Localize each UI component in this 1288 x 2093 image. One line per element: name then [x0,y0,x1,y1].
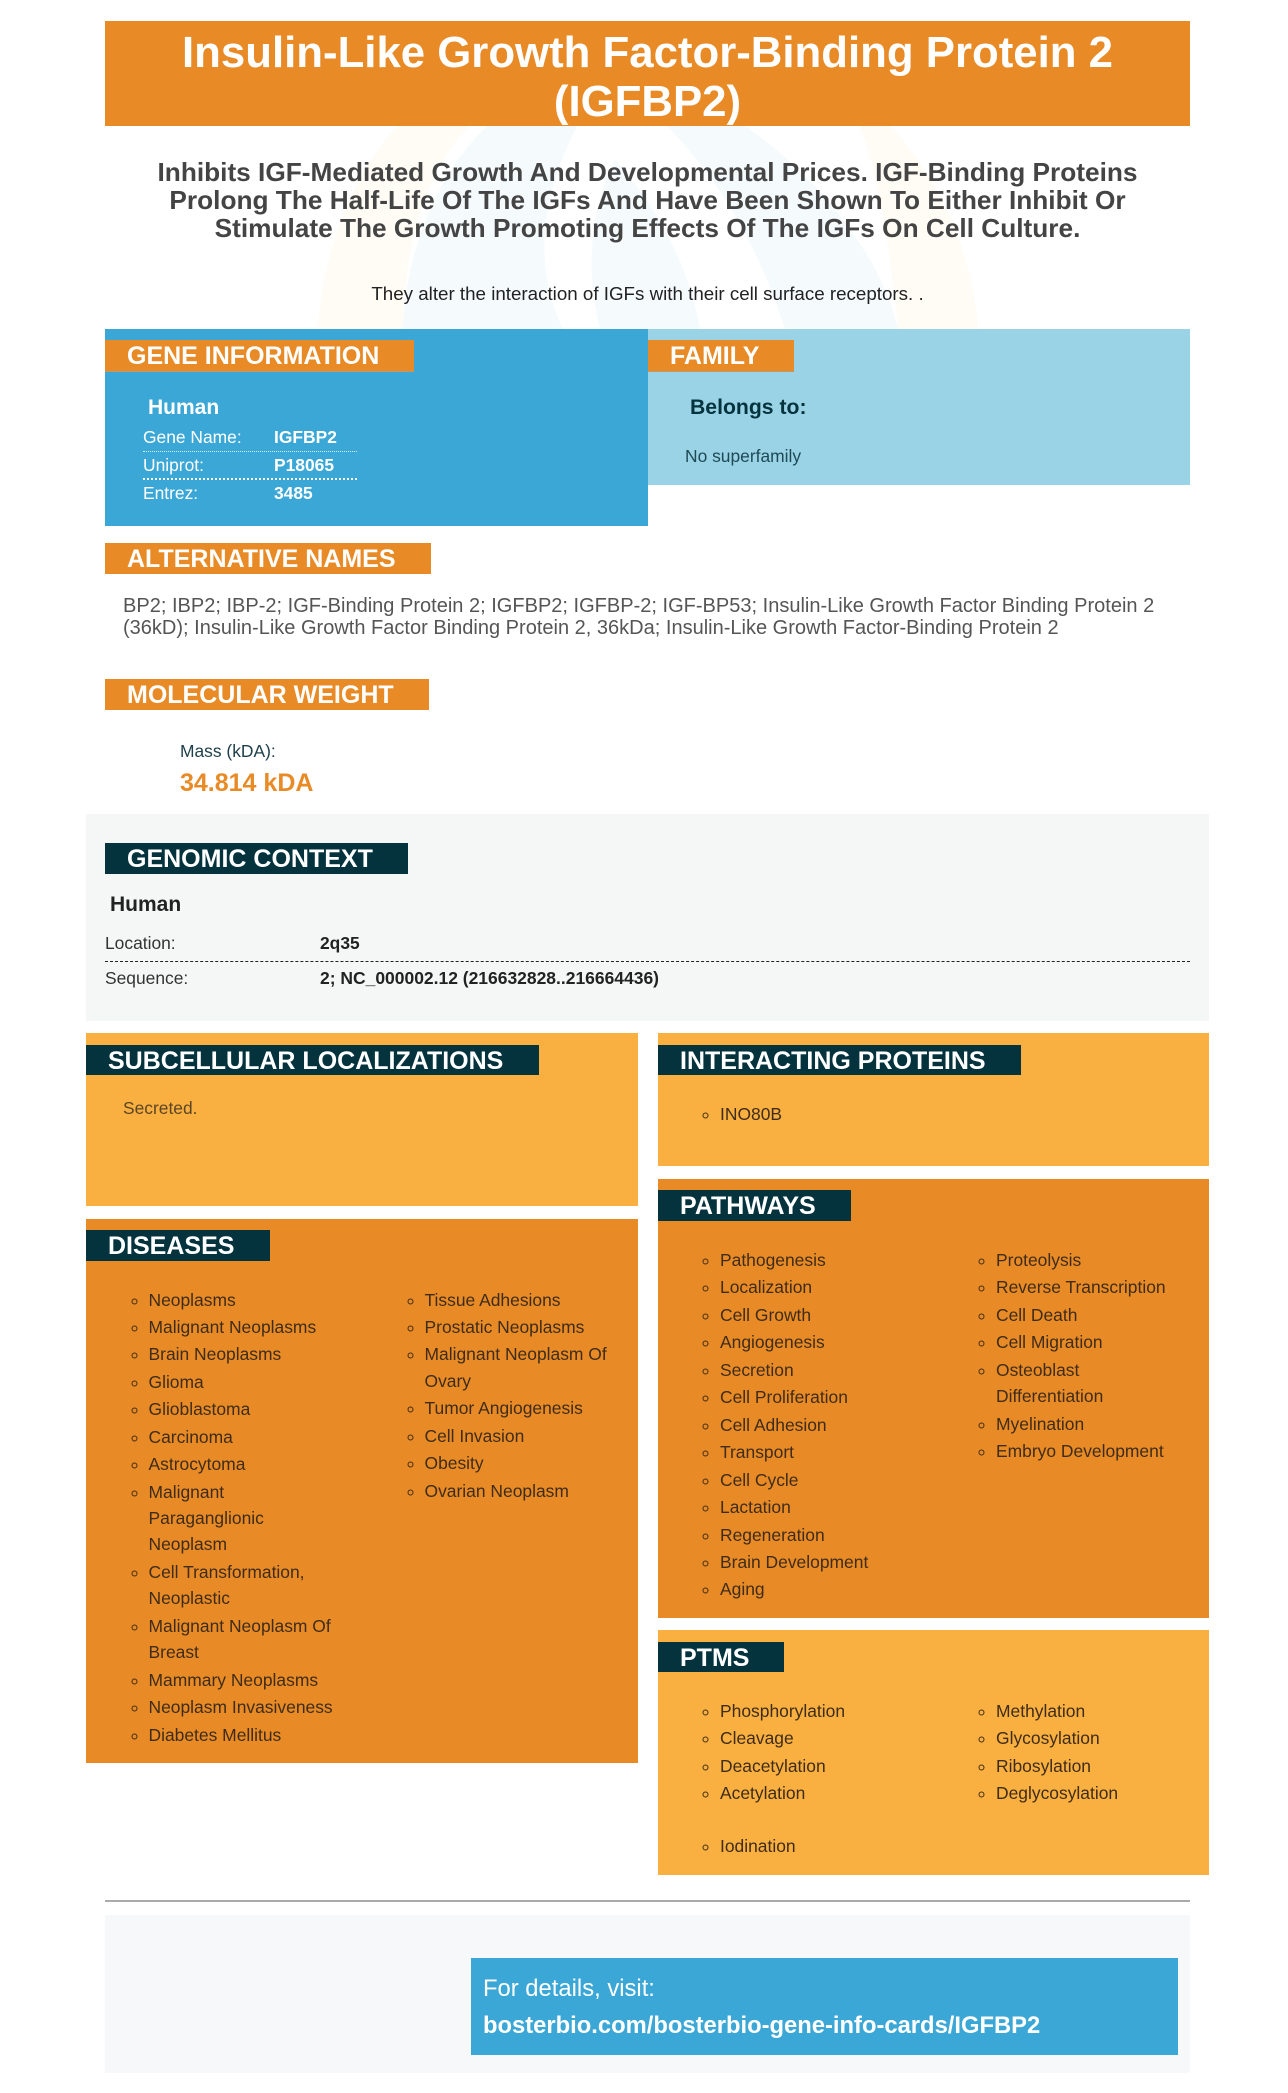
title banner: (IGFBP2) [554,77,741,126]
alternative names text: BP2; IBP2; IBP-2; IGF-Binding Protein 2; IGFBP2; IGFBP-2; IGF-BP53; Insulin-Like Growth Factor Binding Protein 2 [123,595,1154,617]
pathway list column 1: Aging [720,1579,765,1599]
disease list column 2: Cell Invasion [424,1426,524,1446]
panel: pathways [658,1173,1209,1618]
heading: genomic context: GENOMIC CONTEXT [127,845,373,873]
ptm list column 2: Deglycosylation [996,1783,1118,1803]
panel: ptms [658,1630,1209,1875]
ptm list column 1: Phosphorylation [720,1701,845,1721]
entrez row [143,483,313,503]
heading: alternative names: ALTERNATIVE NAMES [127,545,396,573]
pathway list column 1 [702,1253,868,1598]
subtitle summary [158,156,1138,243]
pathway list column 2: Cell Migration [996,1332,1103,1352]
subtitle summary: Prolong The Half-Life Of The IGFs And Have Been Shown To Either Inhibit Or [169,185,1126,215]
disease list column 1: Paraganglionic [148,1508,264,1528]
heading: subcellular localizations: SUBCELLULAR LOCALIZATIONS [108,1047,503,1075]
sequence row [105,968,659,988]
sequence row: Sequence: [105,968,188,988]
details url: bosterbio.com/bosterbio-gene-info-cards/IGFBP2 [483,2012,1040,2039]
heading: pathways [658,1190,851,1221]
uniprot row: P18065 [274,455,334,475]
pathway list column 2: Differentiation [996,1386,1103,1406]
heading: ptms: PTMS [680,1644,749,1672]
ptm list column 1 [702,1701,845,1803]
location row: 2q35 [320,933,360,953]
species label: Human [148,396,219,419]
mass value: 34.814 kDA [180,768,313,796]
heading: molecular weight: MOLECULAR WEIGHT [127,681,394,709]
heading: pathways: PATHWAYS [680,1192,816,1220]
subtitle summary: Inhibits IGF-Mediated Growth And Developmental Prices. IGF-Binding Proteins [158,156,1138,186]
disease list column 2: Prostatic Neoplasms [424,1317,584,1337]
pathway list column 1: Angiogenesis [720,1332,825,1352]
heading: ptms [658,1642,784,1672]
disease list column 1: Neoplasm Invasiveness [148,1697,333,1717]
pathway list column 2 [978,1253,1164,1460]
callout: details link [471,1958,1178,2055]
pathway list column 1: Cell Proliferation [720,1387,848,1407]
ptm list column 2: Glycosylation [996,1728,1100,1748]
family value: No superfamily [685,446,801,466]
gene name row: Gene Name: [143,427,242,447]
pathway list column 1: Transport [720,1442,794,1462]
pathway list column 1: Secretion [720,1360,794,1380]
panel: subcellular localizations [86,1033,638,1206]
disease list column 1: Neoplasms [148,1290,236,1310]
disease list column 1: Cell Transformation, [148,1562,305,1582]
disease list column 2 [408,1290,607,1501]
heading: family: FAMILY [670,342,759,370]
pathway list column 1: Regeneration [720,1525,825,1545]
ptm list column 2 [978,1701,1118,1803]
pathway list column 2: Myelination [996,1414,1084,1434]
ptm list column 1: Deacetylation [720,1756,826,1776]
panel: diseases [86,1219,638,1763]
disease list column 2: Ovarian Neoplasm [424,1481,569,1501]
disease list column 1: Diabetes Mellitus [148,1725,281,1745]
panel: interacting proteins [658,1033,1209,1166]
disease list column 1: Glioma [148,1372,204,1392]
alternative names text: (36kD); Insulin-Like Growth Factor Binding Protein 2, 36kDa; Insulin-Like Growth Factor-Binding Protein 2 [123,617,1059,639]
disease list column 1: Neoplastic [148,1588,230,1608]
disease list column 2: Malignant Neoplasm Of [424,1344,607,1364]
panel: genomic context: 2; NC_000002.12 (216632828..216664436) [320,968,659,988]
disease list column 2: Tumor Angiogenesis [424,1398,583,1418]
disease list column 2: Tissue Adhesions [424,1290,561,1310]
pathway list column 1: Brain Development [720,1552,868,1572]
panel: family [648,329,1190,485]
disease list column 1: Breast [148,1642,199,1662]
pathway list column 1: Pathogenesis [720,1250,826,1270]
disease list column 1: Malignant Neoplasm Of [148,1616,331,1636]
ptm list column 1: Acetylation [720,1783,805,1803]
title banner [105,21,1190,126]
location row: Location: [105,933,176,953]
disease list column 1: Brain Neoplasms [148,1344,281,1364]
disease list column 2: Ovary [424,1371,471,1391]
gene name row [143,424,357,452]
pathway list column 1: Cell Growth [720,1305,811,1325]
heading: family [648,340,794,371]
disease list column 1: Carcinoma [148,1427,233,1447]
pathway list column 1: Cell Cycle [720,1470,798,1490]
disease list column 1: Neoplasm [148,1534,227,1554]
pathway list column 2: Reverse Transcription [996,1277,1166,1297]
panel: footer [105,1915,1190,2073]
background watermark logo [318,126,978,329]
description sentence: They alter the interaction of IGFs with their cell surface receptors. . [371,283,924,304]
disease list column 1: Mammary Neoplasms [148,1670,318,1690]
ptm list extra item: Iodination [720,1836,796,1856]
ptm list column 2: Ribosylation [996,1756,1091,1776]
ptm list column 1: Cleavage [720,1728,794,1748]
species label: Human [110,893,181,916]
panel: genomic context [86,814,1209,1021]
heading: diseases [86,1230,270,1261]
heading: interacting proteins: INTERACTING PROTEINS [680,1047,986,1075]
ptm list column 2: Methylation [996,1701,1085,1721]
protein list: INO80B [720,1104,782,1124]
uniprot row: Uniprot: [143,455,204,475]
pathway list column 2: Cell Death [996,1305,1077,1325]
disease list column 1: Astrocytoma [148,1454,245,1474]
localization text: Secreted. [123,1098,198,1118]
pathway list column 1: Localization [720,1277,812,1297]
disease list column 1: Malignant Neoplasms [148,1317,316,1337]
mass label: Mass (kDA): [180,741,276,761]
pathway list column 2: Embryo Development [996,1441,1164,1461]
title banner: Insulin-Like Growth Factor-Binding Protein 2 [182,28,1113,77]
belongs to label: Belongs to: [690,396,807,419]
pathway list column 2: Proteolysis [996,1250,1081,1270]
disease list column 1: Glioblastoma [148,1399,250,1419]
pathway list column 2: Osteoblast [996,1360,1079,1380]
disease list column 2: Obesity [424,1453,484,1473]
heading: diseases: DISEASES [108,1232,234,1260]
pathway list column 1: Cell Adhesion [720,1415,827,1435]
alternative names text [123,595,1154,639]
uniprot row [143,452,357,480]
panel: gene information [105,329,648,526]
location row [105,930,1190,962]
heading: gene information: GENE INFORMATION [127,342,379,370]
pathway list column 1: Lactation [720,1497,791,1517]
panel: gene information: 3485 [274,483,313,503]
disease list column 1 [132,1290,333,1745]
disease list column 1: Malignant [148,1482,224,1502]
entrez row: Entrez: [143,483,198,503]
gene name row: IGFBP2 [274,427,337,447]
details label: For details, visit: [483,1975,655,2002]
subtitle summary: Stimulate The Growth Promoting Effects Of The IGFs On Cell Culture. [215,213,1080,243]
